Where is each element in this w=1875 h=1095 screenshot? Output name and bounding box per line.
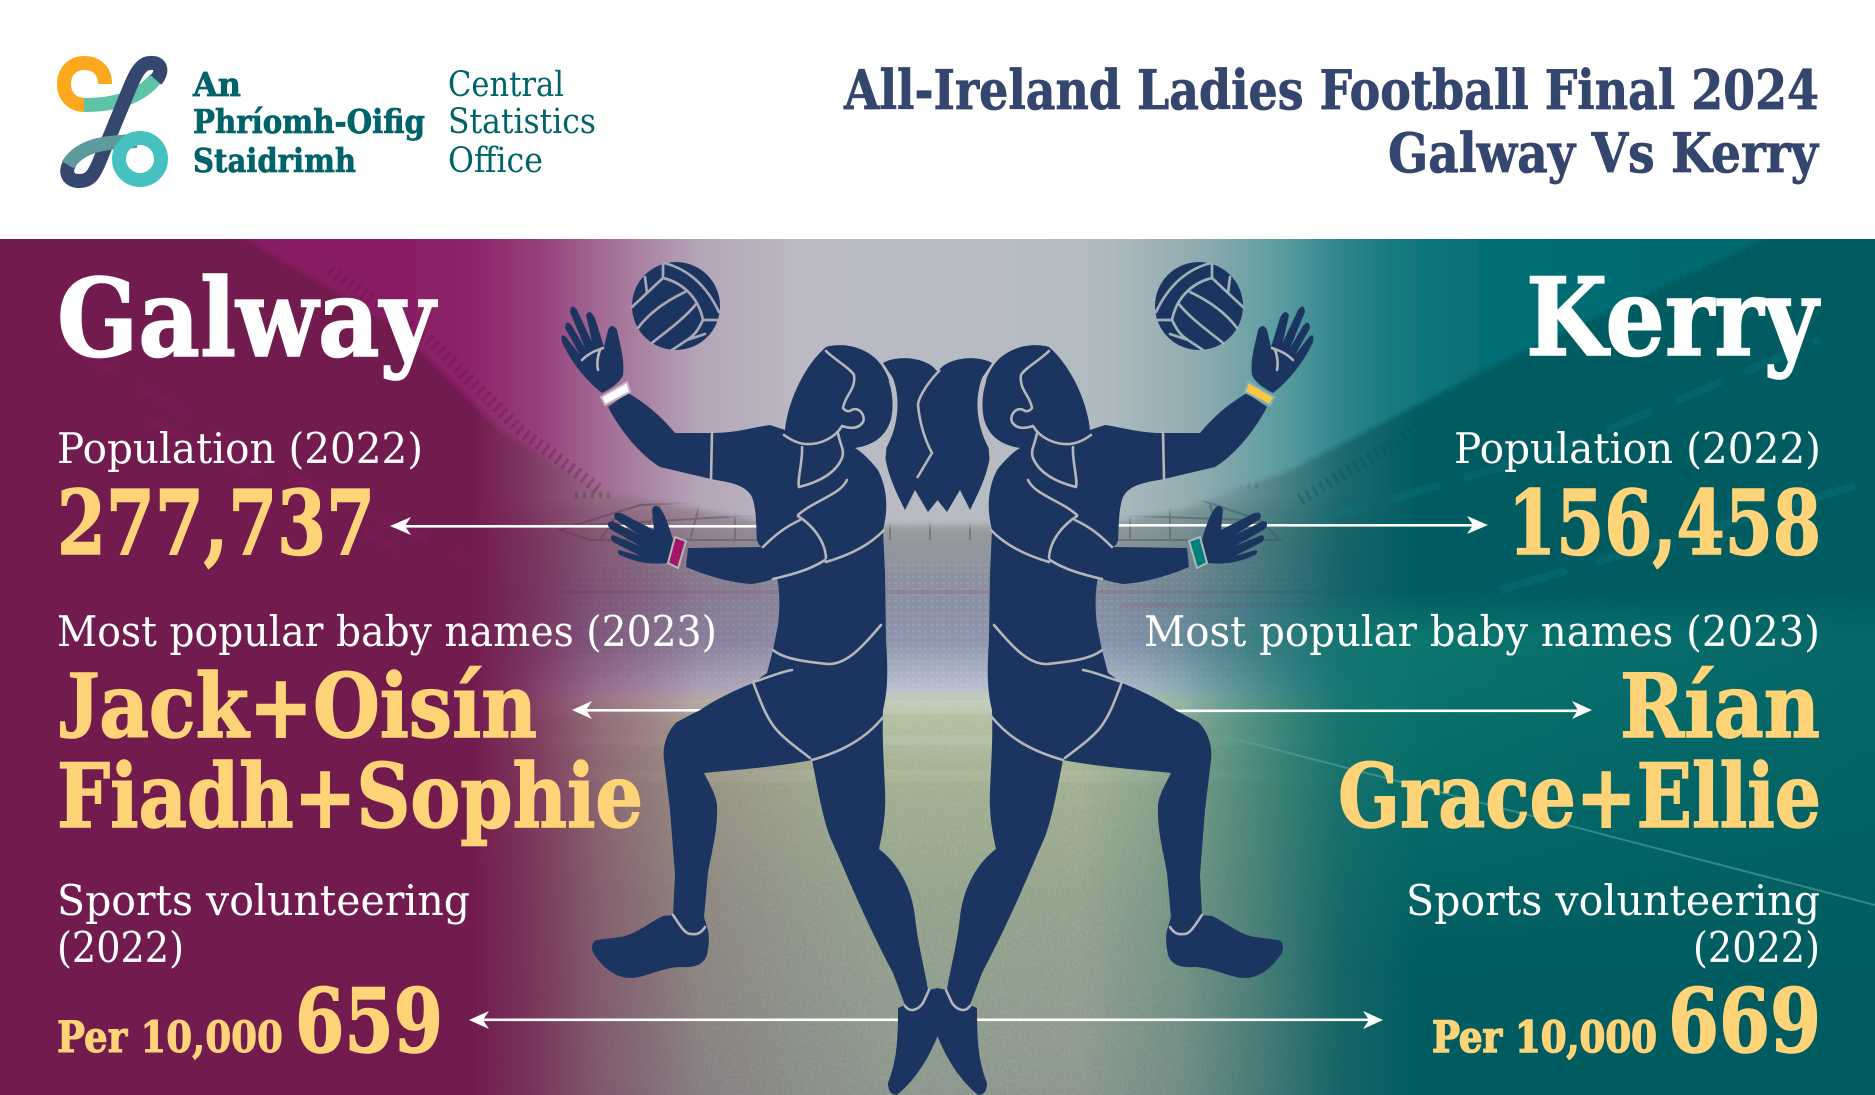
arrow: Galway population [390,517,760,535]
logo text: English name: Central [448,65,564,105]
logo text: Irish name: Phríomh-Oifig [193,102,425,141]
wristband: teal [1189,537,1207,568]
Kerry baby names: Rían [1620,654,1820,758]
Kerry baby names [1338,654,1821,848]
logo text: English name: Statistics [448,102,596,142]
pitch tint on Kerry side [1179,604,1875,879]
arrow: Galway volunteering [469,1011,900,1029]
Galway baby names label: Most popular baby names (2023) [57,607,717,656]
title: Galway Vs Kerry [1388,121,1819,185]
Kerry volunteering value: Per 10,000 [1432,1013,1657,1063]
wristband: maroon [668,537,686,568]
arrow: Kerry volunteering [975,1011,1383,1029]
title [843,58,1819,185]
arrow: Kerry population [1115,516,1488,534]
Galway volunteering label [57,876,470,972]
Galway volunteering value [57,969,443,1073]
Kerry volunteering label [1406,876,1820,972]
arrow: Galway baby names [572,701,707,719]
Galway baby names [57,651,643,848]
stadium background panel [0,230,1875,1095]
Kerry volunteering value [1432,969,1821,1073]
logo text: English name: Office [448,141,543,181]
teal side wash [1105,239,1875,1095]
Kerry population label: Population (2022) [1454,424,1821,473]
Kerry heading: Kerry [1526,255,1821,381]
logo text: Irish name: Staidrimh [193,141,356,180]
Galway volunteering value: Per 10,000 [57,1013,283,1063]
header background [0,0,1875,239]
Galway baby names: Fiadh+Sophie [57,744,643,848]
Galway population label: Population (2022) [57,424,423,473]
Galway volunteering label: (2022) [57,923,184,972]
Kerry baby names label: Most popular baby names (2023) [1144,607,1820,656]
player: Kerry footballer with ball [915,262,1314,1095]
Galway heading: Galway [57,256,438,382]
player: Galway footballer with ball [562,262,960,1095]
Kerry volunteering value: 669 [1668,969,1821,1073]
sky band [230,230,1780,525]
Galway volunteering value: 659 [295,969,443,1073]
logo text: Irish name [192,65,425,180]
Galway volunteering label: Sports volunteering [57,876,470,925]
logo text: Irish name: An [192,65,241,104]
Kerry-side stand shading [1220,250,1875,905]
Galway baby names: Jack+Oisín [57,651,537,758]
logo text: English name [448,65,596,181]
stand seating texture [558,344,1418,1095]
Kerry volunteering label: (2022) [1693,923,1820,972]
wristband: white [601,382,630,405]
Galway population value: 277,737 [57,470,375,575]
Galway-side stand shading [327,266,602,494]
Kerry volunteering label: Sports volunteering [1406,876,1820,925]
wristband: yellow [1245,382,1274,405]
logo: Central Statistics Office mark [64,63,161,181]
purple side wash [0,239,830,1095]
arrow: Kerry baby names [1175,701,1592,719]
